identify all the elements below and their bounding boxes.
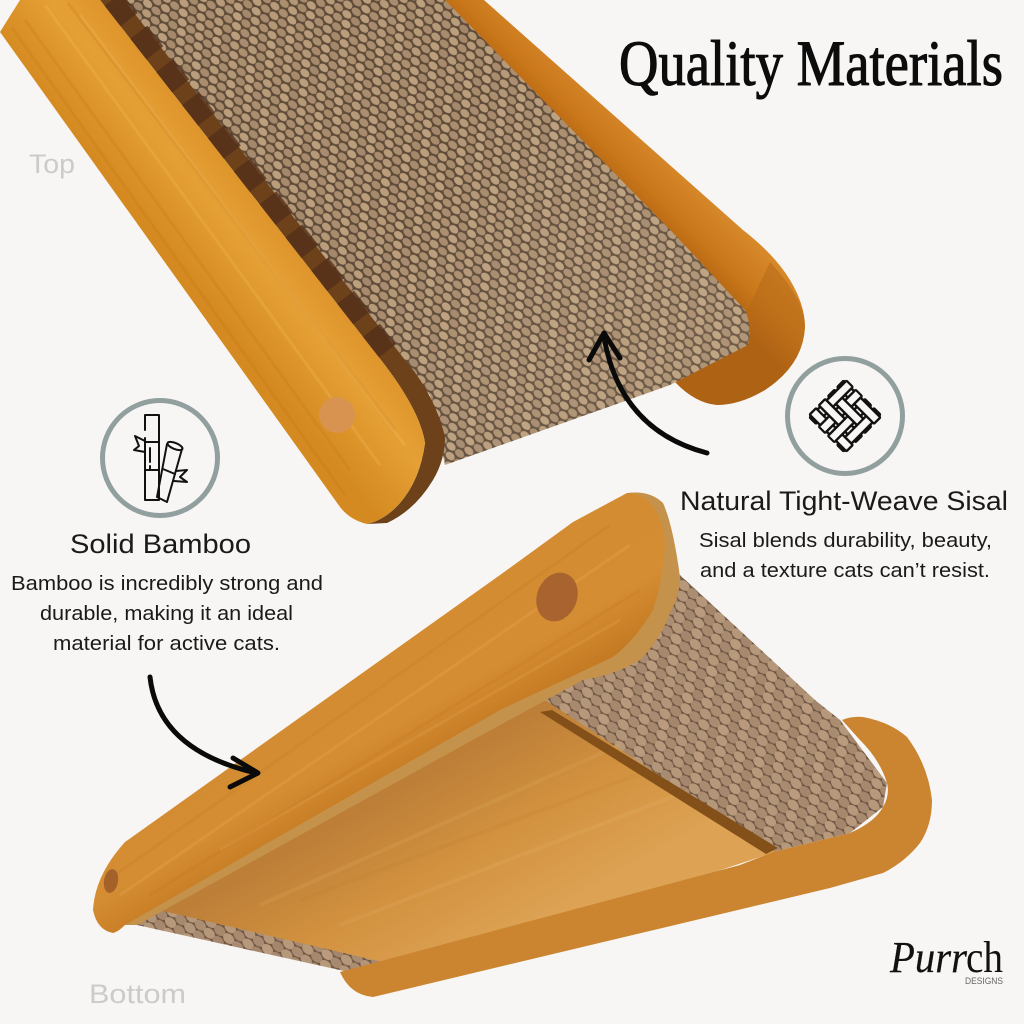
- underside panel: [150, 700, 775, 963]
- logo: Purrch Designs: ch: [966, 933, 1003, 982]
- top board edge banding: [112, 0, 393, 360]
- heading: Solid Bamboo: Solid Bamboo: [70, 529, 251, 559]
- text: bamboo description: durable, making it an ideal: [40, 603, 293, 625]
- icon: sisal weave: [788, 358, 902, 474]
- dark slot on panel: [540, 710, 778, 854]
- logo: Purrch Designs: Purr: [889, 933, 968, 982]
- top board peg: [319, 397, 355, 433]
- bottom board grain: [115, 525, 640, 895]
- text: bamboo description: Bamboo is incredibly strong and: [11, 573, 323, 595]
- small peg: [102, 868, 120, 894]
- main board edge strip: [125, 492, 680, 925]
- top right bamboo rail: [445, 0, 805, 405]
- label: Bottom: Bottom: [89, 979, 186, 1009]
- icon: bamboo: [102, 400, 218, 516]
- text: sisal description: and a texture cats can’t resist.: [700, 560, 990, 582]
- panel grain: [260, 745, 690, 925]
- text: sisal description: [699, 530, 992, 582]
- text: bamboo description: [11, 573, 323, 655]
- large peg: [529, 566, 585, 628]
- text: bamboo description: material for active cats.: [53, 633, 280, 655]
- main bamboo board face: [93, 493, 665, 933]
- lower sisal strip: [137, 905, 390, 973]
- product photo: top view of scratcher: [0, 0, 805, 524]
- top board dark edge: [100, 0, 445, 524]
- lower right bamboo rail: [340, 717, 932, 997]
- logo: Purrch Designs: DESIGNS: [965, 976, 1003, 986]
- text: sisal description: Sisal blends durability, beauty,: [699, 530, 992, 552]
- arrow: sisal: [589, 333, 707, 453]
- top board face: [0, 0, 425, 524]
- bottom sisal roll: [530, 575, 887, 852]
- top board grain: [12, 3, 405, 495]
- logo: Purrch Designs: [889, 933, 1003, 986]
- arrow: bamboo: [150, 677, 258, 787]
- product photo: bottom view of scratcher: [93, 492, 932, 997]
- rail end tone: [675, 262, 805, 405]
- top sisal surface: [120, 0, 749, 465]
- label: Top: Top: [29, 149, 75, 179]
- heading: Natural Tight-Weave Sisal: Natural Tight-Weave Sisal: [680, 486, 1008, 516]
